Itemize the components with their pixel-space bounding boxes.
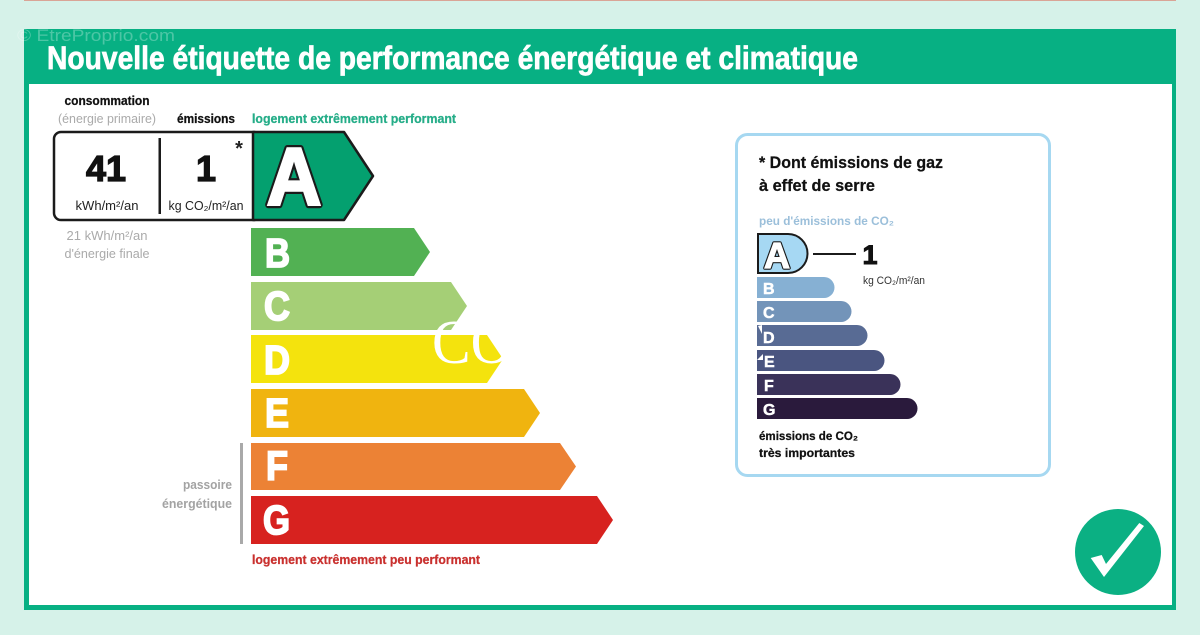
connector line	[813, 253, 856, 255]
CO2 class F	[757, 374, 901, 395]
energy class E	[251, 389, 540, 437]
heading: logement extrêmement peu performant: logement extrêmement peu performant	[252, 553, 481, 567]
passoire label: passoire	[183, 478, 232, 492]
CO2 class E	[757, 350, 884, 371]
heading: gas emissions	[759, 153, 943, 195]
energy class A: A	[266, 132, 322, 223]
energy class B	[251, 228, 430, 276]
final energy note: d'énergie finale	[64, 247, 150, 261]
heading: consommation: consommation	[64, 94, 150, 108]
passoire label	[162, 478, 232, 511]
energy class A	[253, 132, 373, 223]
CO2 class G: G	[763, 402, 775, 419]
CO2 class C	[757, 301, 852, 322]
CO2 class A: A	[764, 235, 790, 276]
heading: logement extrêmement performant: logement extrêmement performant	[252, 112, 457, 126]
CO2 class A: A	[764, 235, 790, 276]
CO2 unit: kg CO₂/m²/an	[863, 275, 925, 287]
CO2 class D: D	[763, 330, 775, 347]
CO2 class D	[757, 325, 868, 347]
watermark: Confiance: CONFIANCE	[432, 309, 763, 377]
value: 41: 41	[86, 148, 126, 189]
energy class G: G	[263, 497, 290, 543]
title: Nouvelle étiquette de performance énergétique et climatique	[47, 40, 858, 76]
energy class B: B	[265, 230, 290, 276]
label: high emissions	[759, 429, 858, 460]
label: high emissions: très importantes	[759, 446, 855, 460]
label: high emissions: émissions de CO₂	[759, 429, 858, 443]
CO2 class C: C	[763, 305, 775, 322]
value: 1: 1	[196, 148, 216, 189]
energy class G	[251, 496, 613, 544]
unit: kWh: kWh/m²/an	[76, 198, 138, 213]
final energy note	[64, 229, 150, 261]
asterisk: *	[235, 138, 243, 160]
panel: values box	[54, 132, 254, 220]
heading: gas emissions: à effet de serre	[759, 176, 875, 195]
energy class C: C	[264, 283, 290, 329]
CO2 class G	[757, 398, 918, 419]
energy class A: A	[266, 132, 322, 223]
energy class C	[251, 282, 467, 330]
passoire label: énergétique	[162, 497, 232, 511]
icon: check mark	[1075, 509, 1161, 595]
CO2 class B: B	[763, 281, 775, 298]
energy class F: F	[266, 443, 288, 489]
CO2 class A	[758, 234, 808, 276]
panel: greenhouse gas emissions	[736, 134, 1050, 476]
heading: émissions: émissions	[177, 112, 235, 126]
heading: gas emissions: * Dont émissions de gaz	[759, 153, 943, 172]
energy class D	[251, 335, 503, 383]
label: low emissions: peu d'émissions de CO₂	[759, 214, 894, 228]
energy class E: E	[265, 390, 289, 436]
unit: kg CO2: kg CO₂/m²/an	[168, 198, 244, 213]
CO2 value: 1	[862, 240, 878, 270]
CO2 class F: F	[764, 378, 774, 395]
CO2 class E: E	[764, 354, 775, 371]
heading: consommation	[58, 94, 156, 126]
final energy note: 21 kWh/m²/an	[66, 229, 148, 243]
heading: consommation: (énergie primaire)	[58, 112, 156, 126]
energy class D: D	[264, 337, 290, 383]
passoire bracket	[240, 443, 243, 544]
energy class F	[251, 443, 576, 490]
CO2 class B	[757, 277, 834, 298]
watermark: EtreProprio: © EtreProprio.com	[17, 26, 175, 45]
